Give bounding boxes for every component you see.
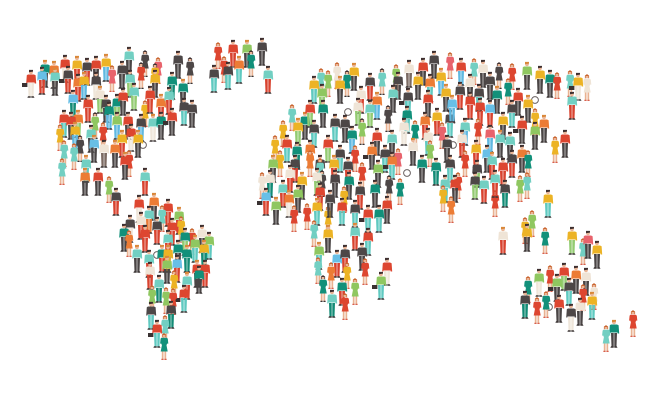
people: Australia xyxy=(520,263,598,332)
people: South-East Asia xyxy=(498,190,602,269)
people: New Zealand xyxy=(602,310,637,352)
people: North America xyxy=(22,47,197,216)
people: Greenland xyxy=(209,38,273,94)
people: Africa xyxy=(257,185,392,320)
people: South America xyxy=(119,193,214,360)
people: Europe and Asia xyxy=(258,51,591,223)
